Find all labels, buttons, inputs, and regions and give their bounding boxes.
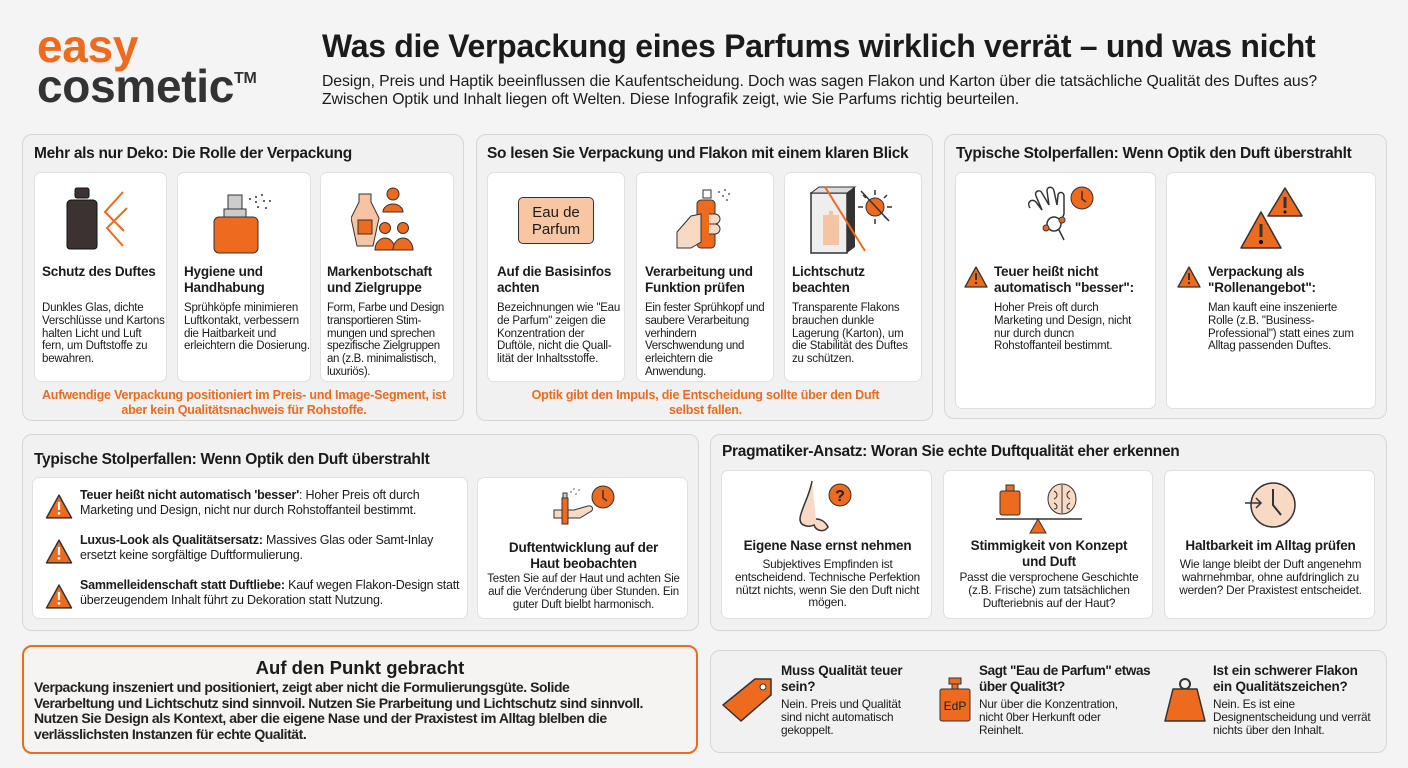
subtitle: Design, Preis und Haptik beeinflussen die Kaufentscheidung. Doch was sagen Flakon und Karton über die tatsächliche Qualität des Duftes aus? — [322, 73, 1317, 90]
card: Rollenangebot — [1166, 172, 1376, 409]
card: Haltbarkeit: Wie lange bleibt der Duft angenehm wahrnehmbar, ohne aufdringlich zu werden? Der Praxistest entscheidet. — [1179, 557, 1362, 597]
card: Duftentwicklung: Haut beobachten — [530, 556, 637, 571]
subtitle: Zwischen Optik und Inhalt liegen oft Welten. Diese Infografik zeigt, wie Sie Parfums richtig beurteilen. — [322, 91, 1019, 108]
card: Rollenangebot: "Rollenangebot": — [1208, 280, 1316, 295]
card: Rollenangebot: Man kauft eine inszenierte Rolle (z.B. "Business-Professional") statt eines zum Alltag passenden Duftes. — [1208, 302, 1354, 352]
card: Stimmigkeit: und Duft — [1022, 554, 1076, 569]
body: Verpackung inszeniert und positioniert, zeigt aber nicht die Formulierungsgüte. Solide — [34, 679, 569, 695]
heading: So lesen Sie Verpackung und Flakon mit einem klaren Blick — [487, 145, 908, 162]
icon: box with sun crossed — [810, 186, 892, 254]
faq 1: Muss Qualität teuer — [781, 663, 902, 678]
card: Basisinfos: Bezeichnungen wie "Eau de Parfum" zeigen die Konzentration der Duftöle, nicht die Quall-lität der Inhaltsstoffe. — [497, 302, 620, 365]
faq 2: Nur über die Konzentration, nicht 0ber Herkunft oder Reinhelt. — [979, 697, 1118, 737]
card: Lichtschutz: Transparente Flakons brauchen dunkle Lagerung (Karton), um die Stabilität des Duftes zu schützen. — [792, 302, 908, 365]
card: Rollenangebot: Verpackung als — [1208, 264, 1304, 279]
card: Schutz: Dunkles Glas, dichte Verschlüsse und Kartons halten Licht und Luft fern, um Duftstoffe zu bewahren. — [42, 302, 165, 365]
icon: EdP label — [518, 197, 594, 244]
card: Stimmigkeit — [943, 470, 1153, 619]
card: Schutz — [34, 172, 167, 382]
card: Nase: Eigene Nase ernst nehmen — [744, 538, 911, 553]
footer note: Aufwendige Verpackung positioniert im Preis- und Image-Segment, ist aber kein Qualitätsnachweis für Rohstoffe. — [42, 388, 446, 416]
icon: weight — [1164, 678, 1206, 722]
panel: Stolperfallen bottom — [22, 434, 699, 631]
faq 2 — [940, 663, 1150, 737]
card: Lichtschutz: Lichtschutz — [792, 264, 865, 279]
logo: cosmeticTM — [37, 60, 257, 112]
card: teuer — [955, 172, 1156, 409]
card: Hygiene: Sprühköpfe minimieren Luftkontakt, verbessern die Haitbarkeit und erleichtern die Dosierung. — [184, 302, 310, 352]
icon: EdP label: Eau de — [532, 204, 580, 221]
panel: Pragmatiker-Ansatz — [710, 434, 1387, 631]
item 1: Teuer heißt nicht automatisch 'besser': Hoher Preis oft durch Marketing und Design, nicht nur durch Rohstoffanteil bestimmt. — [80, 488, 419, 516]
faq 3: Nein. Es ist eine Designentscheidung und verrät nichts über den Inhalt. — [1213, 697, 1370, 737]
heading: Pragmatiker-Ansatz: Woran Sie echte Duftqualität eher erkennen — [722, 443, 1179, 460]
card: Hygiene — [177, 172, 311, 382]
card: Verarbeitung: Ein fester Sprühkopf und saubere Verarbeitung verhindern Verschwendung und erleichtern die Anwendung. — [645, 302, 764, 378]
icon: nose with question: ? — [835, 488, 845, 505]
item 3: Sammelleidenschaft statt Duftliebe: Kauf wegen Flakon-Design statt überzeugendem Inhalt führt zu Dekoration statt Nutzung. — [80, 578, 459, 606]
warning icon — [964, 266, 988, 288]
panel: summary — [22, 645, 698, 754]
icon: balance bottle brain — [996, 484, 1082, 534]
card: Verarbeitung: Funktion prüfen — [645, 280, 745, 295]
card: Markenbotschaft: Markenbotschaft — [327, 264, 432, 279]
body — [34, 679, 643, 742]
panel: FAQ — [710, 650, 1387, 753]
card: Hygiene: Handhabung — [184, 280, 264, 295]
heading: Auf den Punkt gebracht — [256, 657, 464, 678]
card: Duftentwicklung — [477, 477, 688, 619]
faq 1: Nein. Preis und Qualität sind nicht automatisch gekoppelt. — [781, 697, 901, 737]
logo — [37, 20, 257, 112]
icon: EdP bottle — [940, 678, 970, 722]
card: Stimmigkeit: Passt die versprochene Geschichte (z.B. Frische) zum tatsächlichen Dufteriebnis auf der Haut? — [960, 570, 1138, 610]
icon: clock — [1245, 482, 1296, 528]
card: Nase: Subjektives Empfinden ist entscheidend. Technische Perfektion nützt nichts, wenn Sie den Duft nicht mögen. — [735, 557, 920, 609]
footer note: Optik gibt den Impuls, die Entscheidung sollte über den Duft selbst fallen. — [532, 388, 879, 416]
card: teuer: Teuer heißt nicht — [994, 264, 1098, 279]
icon: EdP label: Parfum — [532, 221, 580, 238]
icon: price tag — [722, 678, 772, 722]
card: Schutz: Schutz des Duftes — [42, 264, 156, 279]
card: Markenbotschaft — [320, 172, 454, 382]
panel: Stolperfallen top — [944, 134, 1387, 419]
card: teuer: automatisch "besser": — [994, 280, 1134, 295]
heading: Mehr als nur Deko: Die Rolle der Verpackung — [34, 145, 352, 162]
faq 3 — [1164, 663, 1371, 737]
panel: Verpackung lesen — [476, 134, 933, 421]
card: teuer: Hoher Preis oft durch Marketing und Design, nicht nur durch duncn Rohstoffanteil bestimmt. — [994, 302, 1131, 352]
card: Verarbeitung — [636, 172, 774, 382]
body: verlässlichsten Instanzen für echte Qualität. — [34, 726, 306, 742]
card: Stimmigkeit: Stimmigkeit von Konzept — [971, 538, 1127, 553]
card: Verarbeitung: Verarbeitung und — [645, 264, 753, 279]
faq 3: ein Qualitätszeichen? — [1213, 679, 1348, 694]
card: Markenbotschaft: Form, Farbe und Design transportieren Stim-mungen und sprechen spezifische Zielgruppen an (z.B. minimalistisch, luxuriös). — [327, 302, 444, 378]
card: Markenbotschaft: und Zielgruppe — [327, 280, 422, 295]
icon: warnings — [1240, 187, 1303, 249]
card: Lichtschutz: beachten — [792, 280, 850, 295]
logo: easy — [37, 20, 138, 72]
icon: bottle and people — [351, 188, 414, 250]
icon: dark bottle — [66, 188, 128, 250]
faq 2: Sagt "Eau de Parfum" etwas — [979, 663, 1150, 678]
title: Was die Verpackung eines Parfums wirklich verrät – und was nicht — [322, 28, 1315, 64]
icon: hand, spray, clock — [554, 486, 614, 524]
body: Nutzen Sie Design als Kontext, aber die eigene Nase und der Praxistest im Alltag blelben die — [34, 710, 607, 726]
warning icon — [1177, 266, 1201, 288]
panel: Rolle der Verpackung — [22, 134, 464, 421]
body: Verarbeltung und Lichtschutz sind sinnvoil. Nutzen Sie Prarbeitung und Lichtschutz sind sinnvoll. — [34, 694, 643, 710]
card: list of pitfalls — [32, 477, 468, 619]
card: Haltbarkeit — [1164, 470, 1375, 619]
faq 2: über Qualit3t? — [979, 679, 1065, 694]
heading: Typische Stolperfallen: Wenn Optik den Duft überstrahlt — [956, 145, 1351, 162]
subtitle — [322, 73, 1317, 108]
card: Hygiene: Hygiene und — [184, 264, 263, 279]
card: Lichtschutz — [784, 172, 922, 382]
icon: wrist watch — [1028, 186, 1094, 240]
icon: hand with spray — [676, 189, 730, 248]
card: Nase — [721, 470, 932, 619]
icon: spray bottle — [214, 194, 271, 254]
card: Duftentwicklung: Testen Sie auf der Haut und achten Sie auf die Verćnderung über Stunden. Ein guter Duft bielbt harmonisch. — [487, 573, 680, 611]
heading: Typische Stolperfallen: Wenn Optik den Duft überstrahlt — [34, 451, 429, 468]
card: Basisinfos: achten — [497, 280, 539, 295]
faq 1: sein? — [781, 679, 815, 694]
card: Haltbarkeit: Haltbarkeit im Alltag prüfen — [1185, 538, 1356, 553]
faq 1 — [722, 663, 902, 737]
faq 3: Ist ein schwerer Flakon — [1213, 663, 1358, 678]
icon: EdP bottle: EdP — [944, 699, 966, 713]
item 2: Luxus-Look als Qualitätsersatz: Massives Glas oder Samt-Inlay ersetzt keine sorgfältige Duftformulierung. — [80, 533, 433, 562]
icon: nose with question — [799, 480, 852, 532]
card: Basisinfos — [487, 172, 625, 382]
card: Duftentwicklung: Duftentwicklung auf der — [509, 540, 658, 555]
card: Basisinfos: Auf die Basisinfos — [497, 264, 611, 279]
